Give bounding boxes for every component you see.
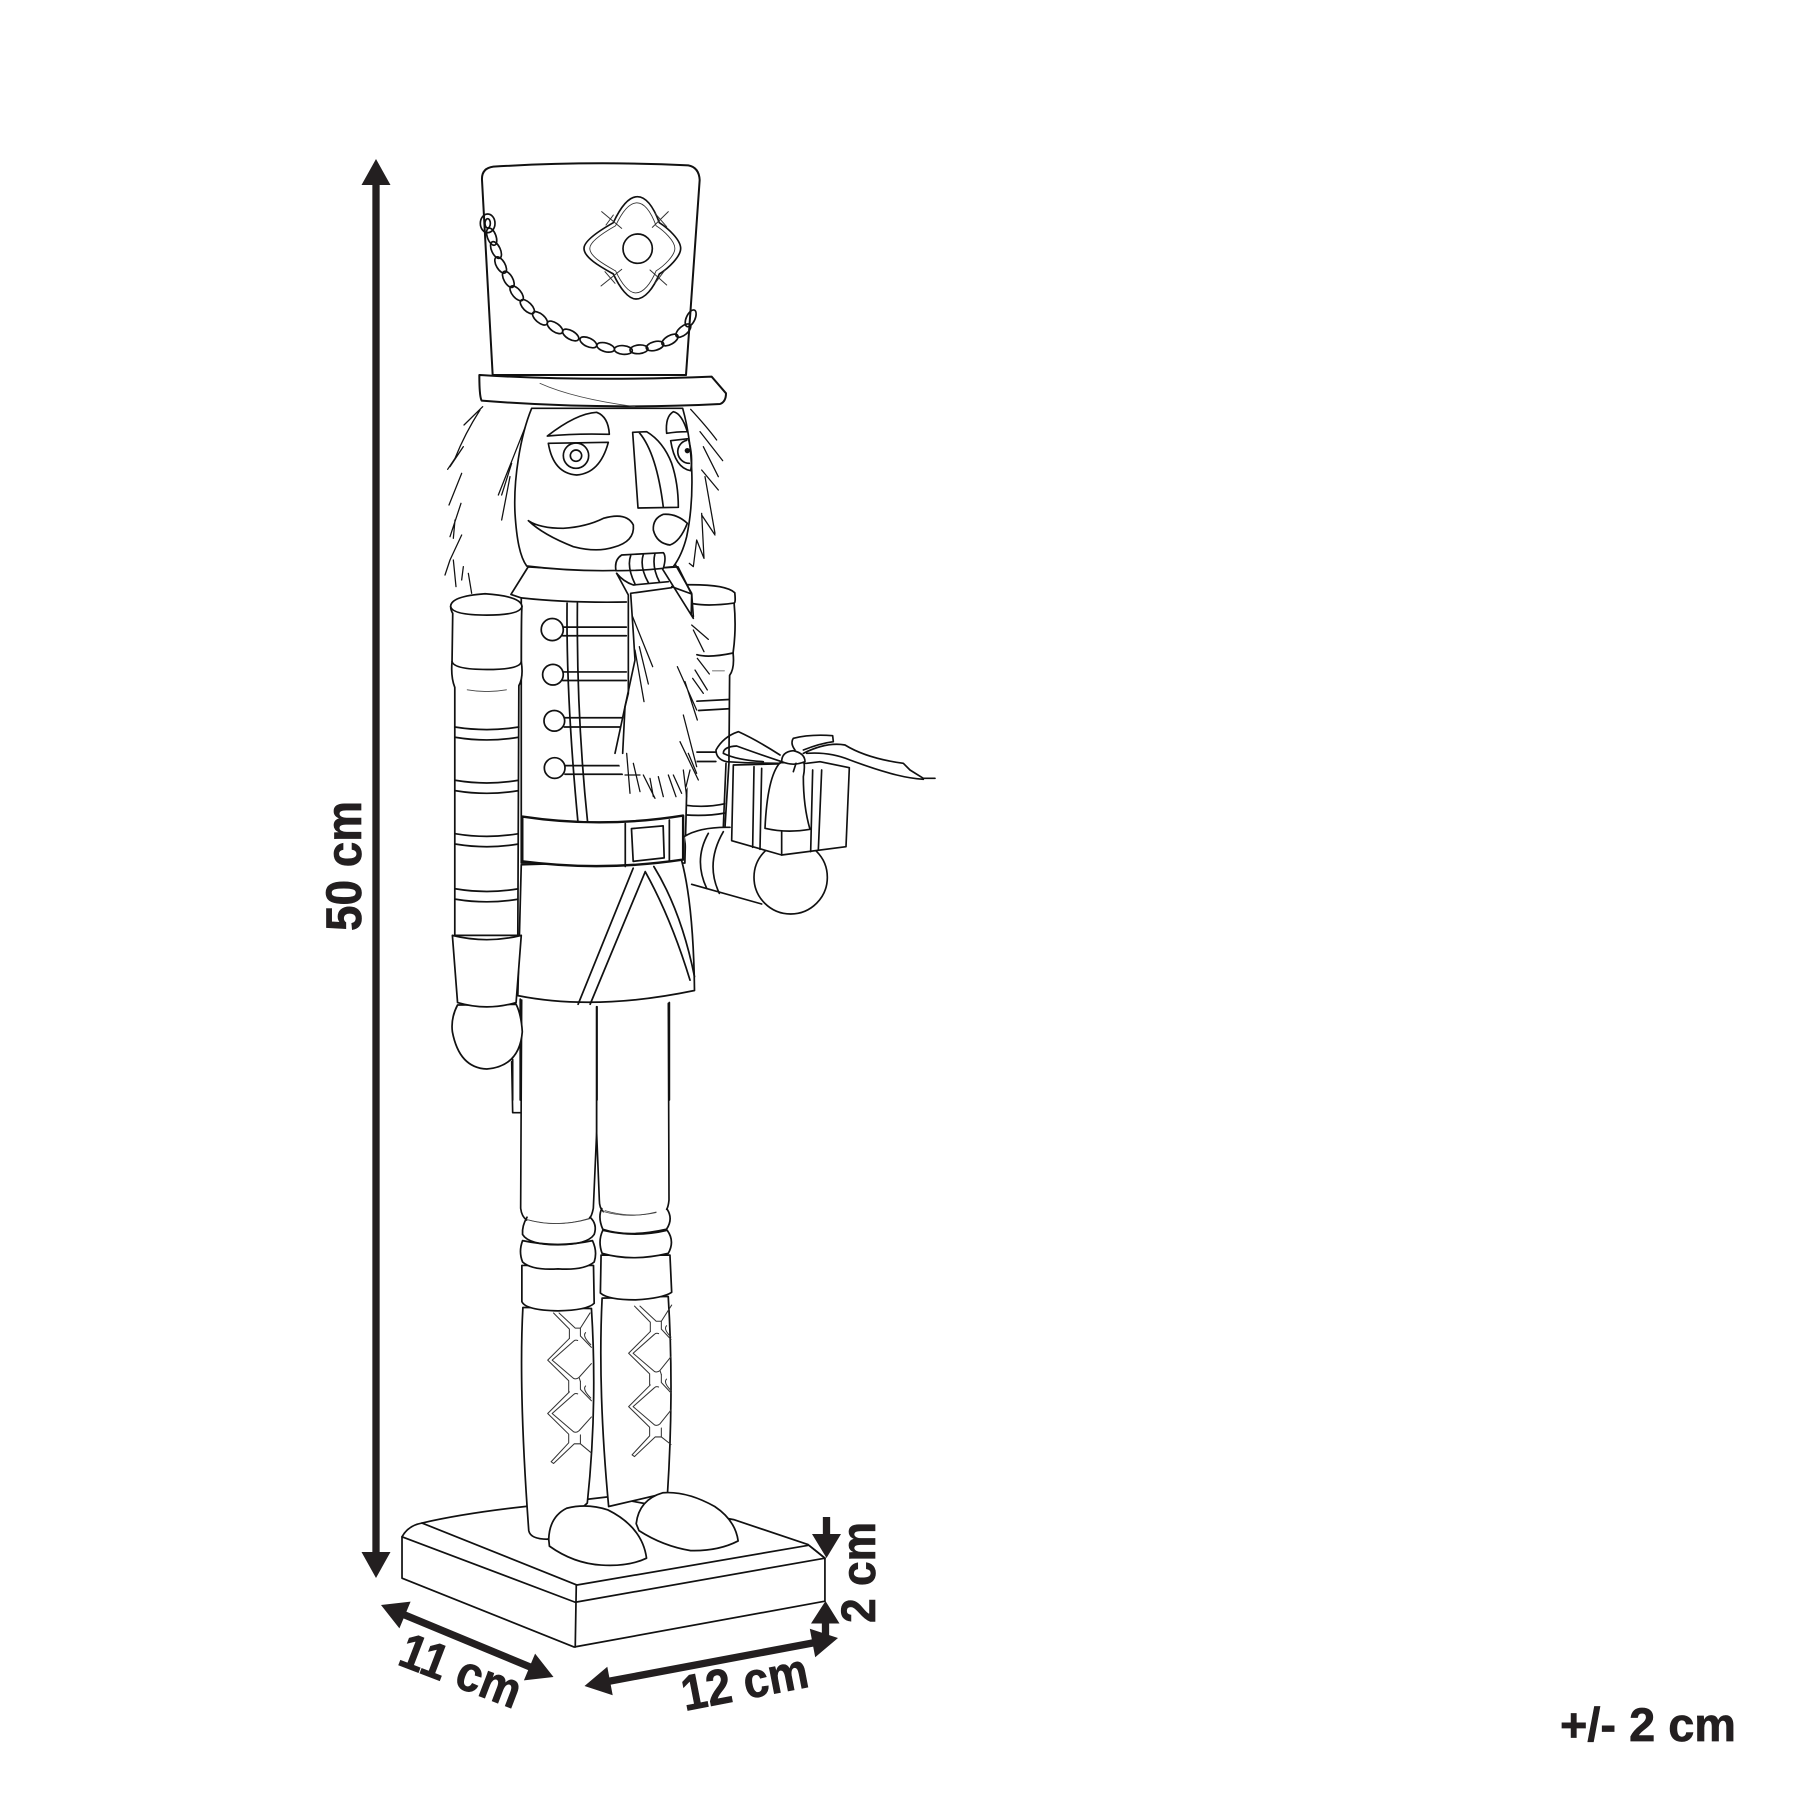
far arm bbox=[685, 585, 735, 836]
forearm, hand and gift bbox=[684, 732, 935, 914]
near arm bbox=[451, 594, 522, 1069]
torso bbox=[511, 567, 692, 863]
beard bbox=[615, 564, 709, 798]
label: 11 cm: 11 cm bbox=[392, 1622, 530, 1719]
body and arms bbox=[451, 567, 735, 1100]
legs bbox=[512, 1000, 669, 1224]
hat emblem bbox=[584, 197, 681, 299]
mouth bbox=[528, 516, 633, 550]
label: 12 cm: 12 cm bbox=[676, 1642, 813, 1722]
base bbox=[402, 1497, 825, 1647]
skirt bbox=[518, 860, 694, 1004]
right boot bbox=[600, 1209, 672, 1507]
hand bbox=[754, 841, 827, 914]
arrow: depth 11 cm bbox=[381, 1602, 554, 1680]
belt bbox=[522, 816, 683, 867]
hat chain bbox=[480, 214, 698, 355]
hair bbox=[445, 407, 723, 593]
arrow: width 12 cm bbox=[584, 1629, 838, 1695]
left boot bbox=[520, 1217, 596, 1539]
left eye bbox=[547, 412, 609, 475]
cheek bbox=[653, 514, 687, 545]
right eye bbox=[666, 412, 692, 471]
nose bbox=[633, 432, 678, 508]
head bbox=[515, 408, 692, 571]
gift box bbox=[716, 732, 935, 855]
moustache bbox=[616, 553, 668, 585]
leg tops bbox=[513, 999, 669, 1100]
forearm bbox=[684, 827, 780, 904]
label: 2 cm: 2 cm bbox=[833, 1522, 886, 1623]
arrow: base height 2 cm bbox=[811, 1517, 841, 1636]
boots and base bbox=[402, 1209, 825, 1647]
nutcracker figure bbox=[402, 163, 935, 1647]
hat bbox=[479, 163, 726, 407]
hat brim bbox=[479, 375, 726, 407]
tolerance note: +/- 2 cm bbox=[1560, 1698, 1736, 1751]
label: 50 cm: 50 cm bbox=[316, 801, 372, 931]
feet bbox=[549, 1493, 738, 1565]
arrow: height 50 cm bbox=[362, 159, 390, 1578]
